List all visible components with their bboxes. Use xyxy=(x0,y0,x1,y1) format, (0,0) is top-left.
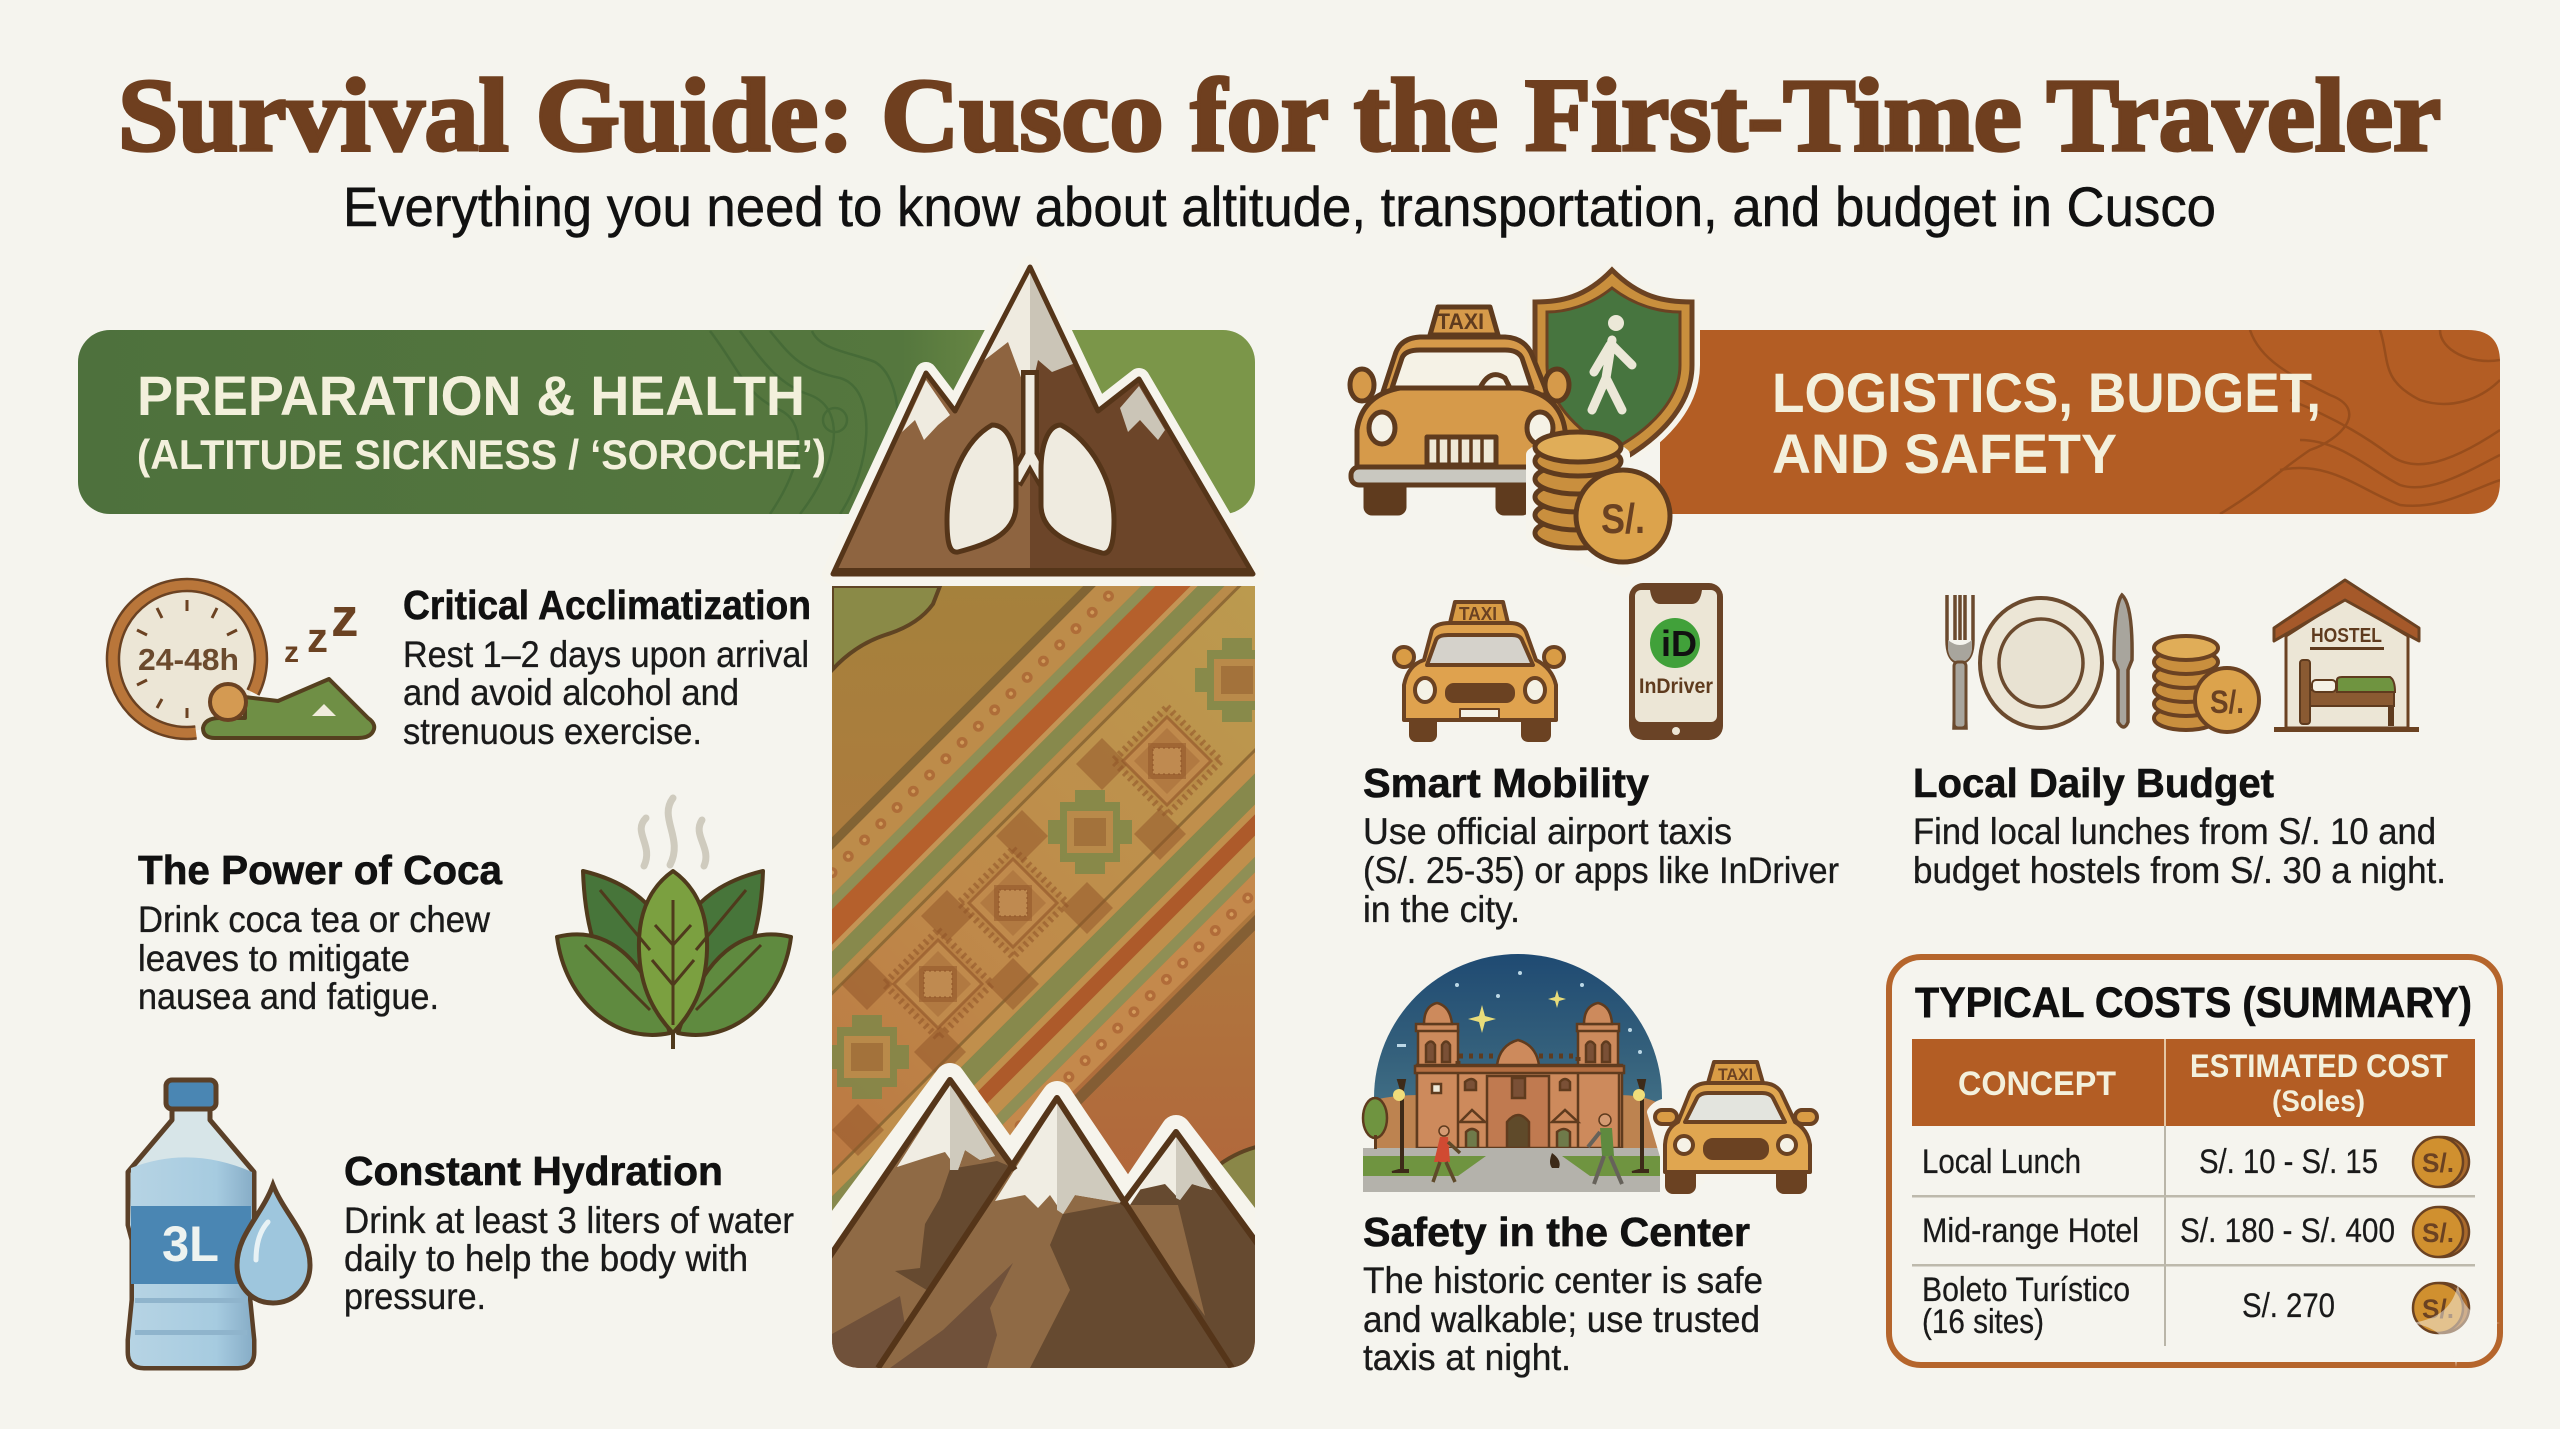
banner heading: LOGISTICS, BUDGET, xyxy=(1772,361,2321,424)
banner heading xyxy=(1772,361,2321,485)
panel: central textile column xyxy=(832,586,1255,1368)
table header: CONCEPT xyxy=(1958,1065,2116,1103)
table header: (Soles) xyxy=(2272,1085,2365,1118)
textile motifs xyxy=(825,638,1279,1156)
table rows: S/. 270 xyxy=(2242,1287,2335,1325)
description: leaves to mitigate xyxy=(138,938,410,979)
icon: coin row 1: S/. xyxy=(2422,1148,2454,1178)
description: Use official airport taxis xyxy=(1363,811,1732,852)
description: taxis at night. xyxy=(1363,1337,1571,1378)
description xyxy=(1913,811,2446,891)
icon: taxi: TAXI xyxy=(1437,309,1484,334)
icon: cathedral at night xyxy=(1363,954,1662,1192)
description: (S/. 25-35) or apps like InDriver xyxy=(1363,850,1839,891)
description xyxy=(344,1200,794,1317)
icon: phone with InDriver xyxy=(1629,583,1723,740)
panel: preparation and health banner xyxy=(78,330,1255,514)
description: daily to help the body with xyxy=(344,1238,748,1279)
icon: coins xyxy=(2154,636,2259,732)
icon: taxi front xyxy=(1394,602,1564,740)
watermark sparkle xyxy=(2411,1283,2500,1367)
description: Drink coca tea or chew xyxy=(138,899,490,940)
table rows: Boleto Turístico xyxy=(1922,1271,2130,1309)
description xyxy=(1363,1260,1763,1378)
icon: fork, plate and knife xyxy=(1947,595,2132,728)
icon: clock with sleeping person: 24-48h xyxy=(138,642,239,677)
heading: Constant Hydration xyxy=(344,1148,723,1194)
panel: typical costs table xyxy=(1889,957,2500,1367)
table rows: (16 sites) xyxy=(1922,1303,2044,1341)
icon: safety shield xyxy=(1535,270,1692,465)
icon: coin row 2 xyxy=(2413,1207,2469,1257)
table rows: S/. 10 - S/. 15 xyxy=(2199,1143,2378,1181)
diagonal woven bands xyxy=(832,586,1255,1352)
icon: water bottle and drop xyxy=(128,1080,310,1368)
description: pressure. xyxy=(344,1276,486,1317)
table rows: Mid-range Hotel xyxy=(1922,1212,2139,1250)
description: and avoid alcohol and xyxy=(403,672,739,713)
icon: phone with InDriver: InDriver xyxy=(1639,675,1713,698)
bottom mountain range xyxy=(820,1078,1270,1368)
pedestrians xyxy=(1433,1114,1622,1184)
icon: taxi xyxy=(1652,1062,1817,1192)
item: smart mobility xyxy=(1363,583,1839,930)
icon: coca leaves with steam xyxy=(557,798,791,1049)
icon: coin row 3: S/. xyxy=(2422,1294,2454,1324)
icon: coin stack xyxy=(1533,432,1670,570)
description: Drink at least 3 liters of water xyxy=(344,1200,794,1241)
description xyxy=(403,634,809,752)
table header xyxy=(1912,1039,2475,1126)
icon: coins: S/. xyxy=(2210,684,2244,720)
icon: clock with sleeping person: z xyxy=(307,614,328,661)
church building xyxy=(1415,1003,1624,1148)
description: strenuous exercise. xyxy=(403,711,702,752)
banner heading: AND SAFETY xyxy=(1772,422,2117,485)
heading: Safety in the Center xyxy=(1363,1209,1750,1255)
icon: large taxi, shield and coins xyxy=(1350,270,1692,570)
table title: TYPICAL COSTS (SUMMARY) xyxy=(1915,979,2472,1027)
description xyxy=(1363,811,1839,930)
description: Rest 1–2 days upon arrival xyxy=(403,634,809,675)
icon: coin row 1 xyxy=(2413,1137,2469,1187)
banner subheading: (ALTITUDE SICKNESS / ‘SOROCHE’) xyxy=(137,431,826,478)
icon: water bottle and drop: 3L xyxy=(162,1216,219,1272)
icon: taxi front: TAXI xyxy=(1459,604,1497,624)
panel: logistics banner xyxy=(1660,330,2500,514)
description: budget hostels from S/. 30 a night. xyxy=(1913,850,2446,891)
description: The historic center is safe xyxy=(1363,1260,1763,1301)
icon: coin stack: S/. xyxy=(1601,495,1645,542)
table rows: S/. 180 - S/. 400 xyxy=(2180,1212,2395,1250)
table rows: Local Lunch xyxy=(1922,1143,2081,1181)
banner heading: PREPARATION & HEALTH xyxy=(137,364,805,427)
description xyxy=(138,899,490,1017)
description: nausea and fatigue. xyxy=(138,976,439,1017)
icon: phone with InDriver: iD xyxy=(1661,623,1697,664)
icon: clock with sleeping person: z xyxy=(331,586,358,648)
item: safety in the center xyxy=(1363,954,1817,1378)
icon: hostel xyxy=(2274,580,2419,732)
description: in the city. xyxy=(1363,889,1520,930)
lungs xyxy=(947,370,1114,553)
icon: mountain with lungs xyxy=(833,267,1253,575)
icon: clock with sleeping person: z xyxy=(284,636,299,669)
heading: Smart Mobility xyxy=(1363,760,1649,806)
icon: coin row 3 xyxy=(2413,1283,2469,1333)
heading: The Power of Coca xyxy=(138,847,503,893)
item: critical acclimatization xyxy=(107,579,811,752)
subtitle: Everything you need to know about altitude, transportation, and budget in Cusco xyxy=(343,175,2216,238)
item: the power of coca xyxy=(138,798,791,1049)
heading: Critical Acclimatization xyxy=(403,582,811,628)
icon: clock with sleeping person xyxy=(107,579,374,739)
icon: hostel: HOSTEL xyxy=(2311,625,2382,647)
icon: taxi: TAXI xyxy=(1718,1065,1753,1084)
description: and walkable; use trusted xyxy=(1363,1299,1760,1340)
tree and lamps xyxy=(1363,1080,1648,1172)
item: constant hydration xyxy=(128,1080,794,1368)
title: Survival Guide: Cusco for the First-Time Traveler xyxy=(118,58,2441,173)
description: Find local lunches from S/. 10 and xyxy=(1913,811,2436,852)
icon: taxi xyxy=(1350,307,1569,513)
table header: ESTIMATED COST xyxy=(2190,1048,2448,1084)
icon: coin row 2: S/. xyxy=(2422,1218,2454,1248)
plaza xyxy=(1363,1148,1660,1192)
table rows xyxy=(1912,1126,2475,1346)
item: local daily budget xyxy=(1913,580,2446,891)
heading: Local Daily Budget xyxy=(1913,760,2274,806)
